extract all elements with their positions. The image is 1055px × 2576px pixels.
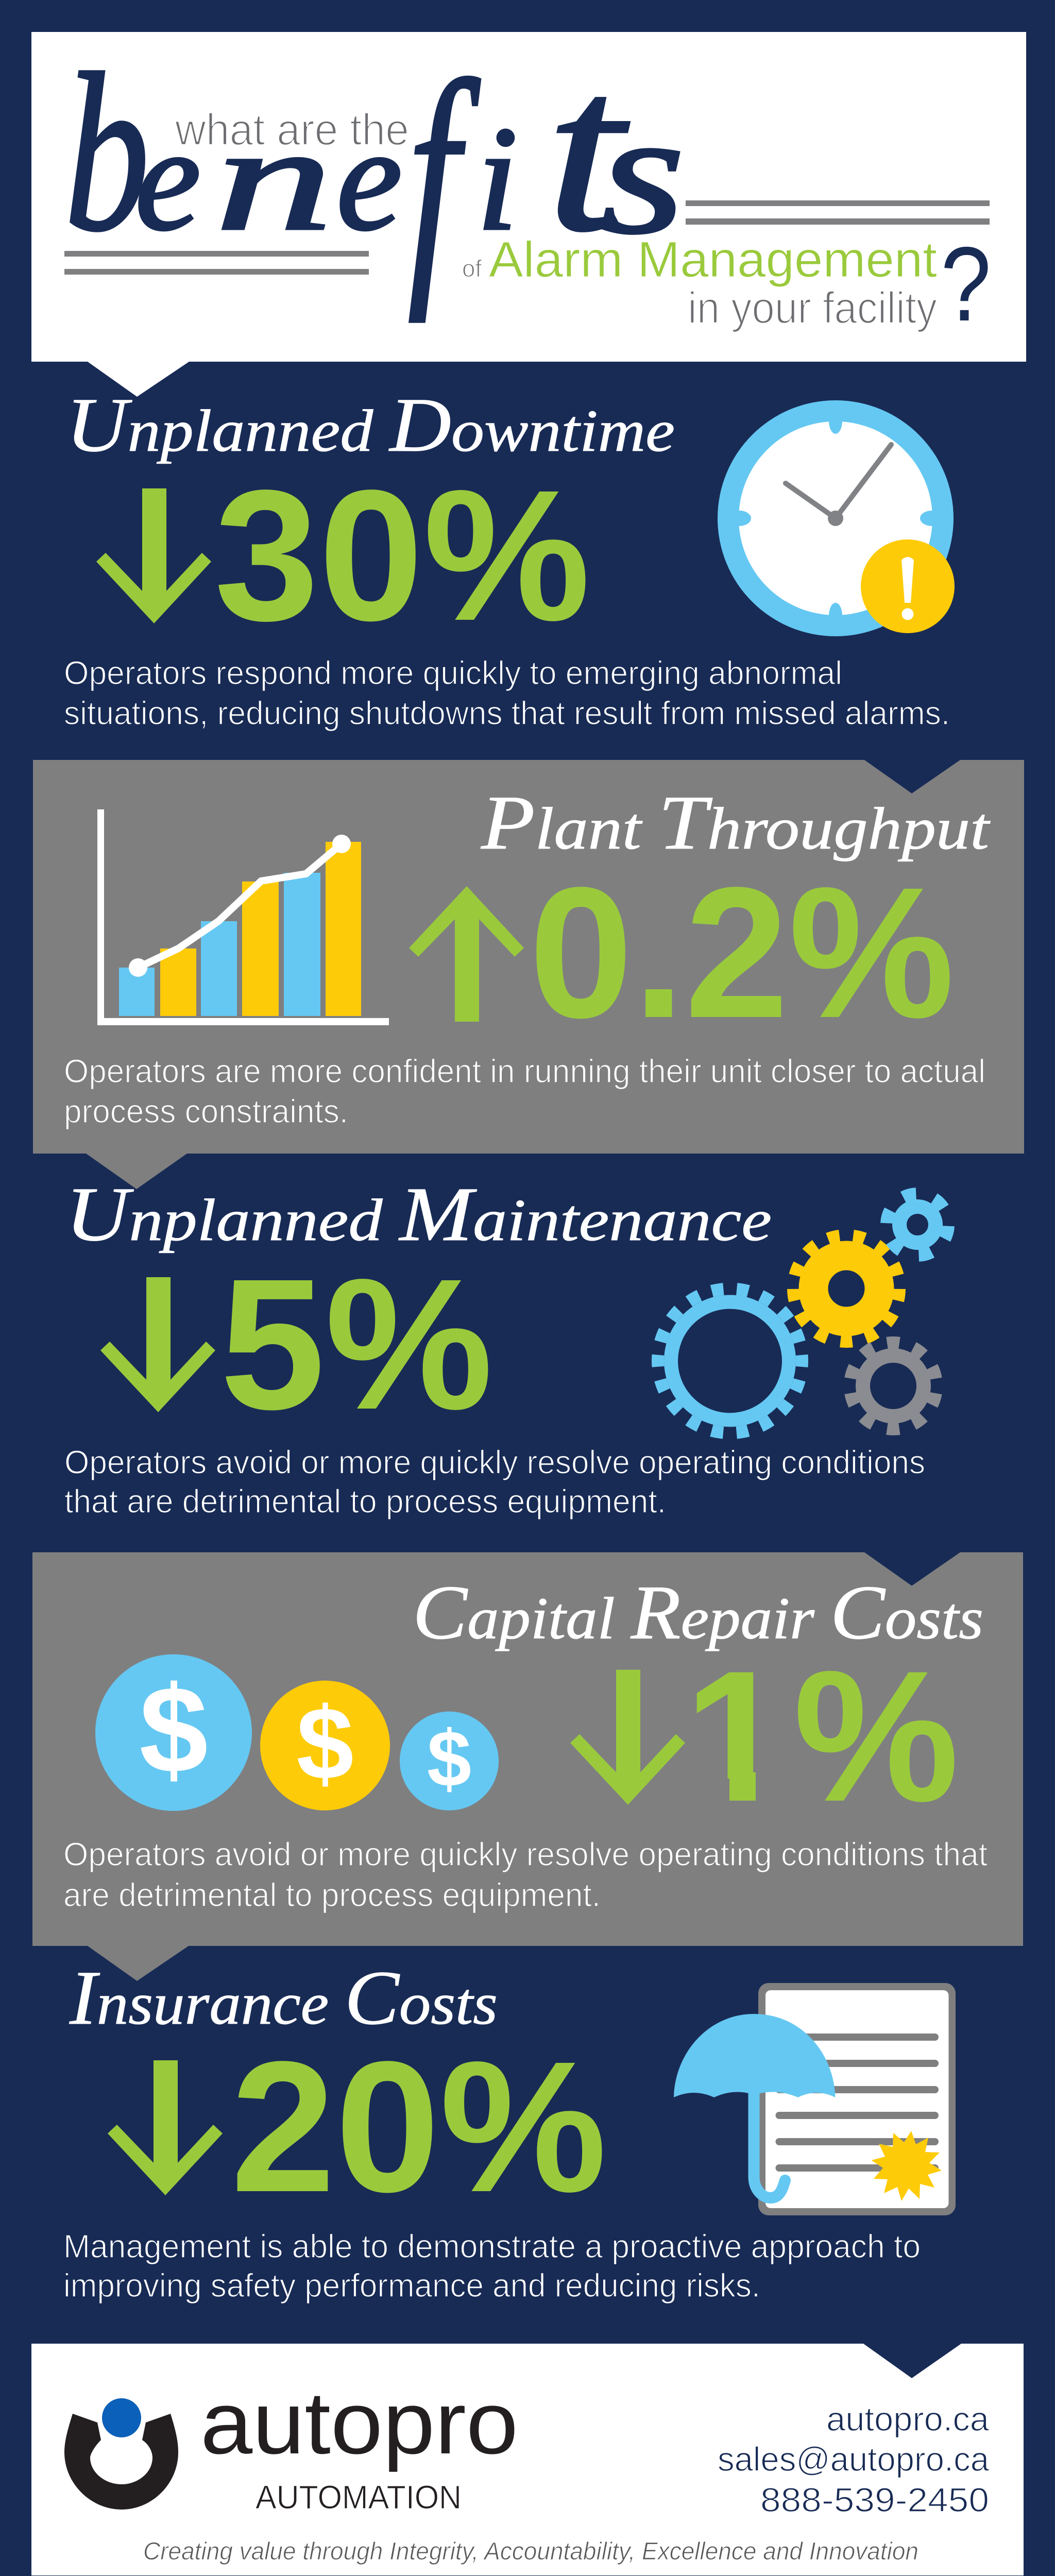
icon: policy document and umbrella: [674, 1983, 956, 2215]
body text: [64, 654, 950, 732]
icon: clock: [718, 400, 955, 636]
panel: header: [31, 23, 1026, 397]
body text: are detrimental to process equipment.: [63, 1876, 601, 1913]
arrow up: [409, 886, 524, 1022]
icon: coins: $: [296, 1686, 354, 1801]
heading: benefits: s: [600, 76, 685, 270]
title: Insurance Costs: [69, 1955, 498, 2041]
stat: 1%: %: [793, 1632, 959, 1840]
body text: [64, 1053, 985, 1130]
contact details: [718, 2400, 989, 2519]
heading: question mark: ?: [941, 225, 991, 343]
rules left: [64, 251, 369, 275]
arrow down: [100, 1277, 215, 1412]
heading: benefits: [64, 23, 685, 323]
arrow down: [108, 2060, 223, 2195]
stat: 0.2%: 0.2%: [529, 848, 955, 1057]
heading: benefits: n: [215, 96, 333, 261]
gear: large blue: [652, 1283, 808, 1439]
heading: in your facility: in your facility: [688, 283, 937, 333]
rules right: [686, 200, 990, 225]
title: Capital Repair Costs: [413, 1570, 983, 1655]
stat: 5%: 5%: [220, 1240, 493, 1448]
body text: [64, 1444, 925, 1520]
gear: yellow: [787, 1229, 906, 1348]
body text: Operators avoid or more quickly resolve operating conditions that: [63, 1836, 988, 1873]
stat: 1%: [683, 1632, 959, 1840]
icon: coins: [95, 1654, 499, 1811]
bar chart: [97, 809, 389, 1025]
logo mark: [64, 2398, 178, 2510]
arrow down: [96, 488, 211, 623]
body text: process constraints.: [64, 1093, 348, 1130]
body text: situations, reducing shutdowns that result from missed alarms.: [64, 694, 950, 732]
body text: Operators are more confident in running their unit closer to actual: [64, 1053, 985, 1090]
heading: benefits: t: [546, 23, 633, 279]
body text: that are detrimental to process equipment.: [64, 1483, 666, 1520]
icon: coins: $: [139, 1660, 208, 1799]
contact details: 888-539-2450: [760, 2481, 989, 2519]
body text: [63, 2228, 921, 2304]
contact details: autopro.ca: [826, 2400, 989, 2438]
panel: plant throughput: [33, 760, 1024, 1189]
gear: small blue: [876, 1183, 959, 1266]
body text: [63, 1836, 988, 1913]
title: Unplanned Maintenance: [65, 1172, 772, 1257]
panel: company contact: [31, 2344, 1024, 2575]
stat: 20%: 20%: [231, 2022, 607, 2231]
heading: of: of: [462, 255, 482, 282]
title: Plant Throughput: [481, 780, 991, 866]
heading: benefits: e: [336, 96, 402, 261]
title: Unplanned Downtime: [66, 382, 675, 468]
heading: benefits: f: [407, 27, 483, 323]
heading: benefits: e: [135, 96, 201, 261]
section: unplanned downtime: [64, 382, 955, 732]
tagline: Creating value through Integrity, Accountability, Excellence and Innovation: [143, 2538, 918, 2565]
arrow down: [570, 1670, 685, 1805]
body text: improving safety performance and reducing risks.: [63, 2267, 760, 2304]
heading: what are the: what are the: [175, 105, 409, 155]
contact details: sales@autopro.ca: [718, 2440, 989, 2478]
body text: Management is able to demonstrate a proactive approach to: [63, 2228, 921, 2265]
gear: grey: [844, 1337, 942, 1435]
logo text: automation: AUTOMATION: [256, 2479, 462, 2516]
body text: Operators respond more quickly to emerging abnormal: [64, 654, 842, 691]
body text: Operators avoid or more quickly resolve operating conditions: [64, 1444, 925, 1481]
heading: Alarm Management: Alarm Management: [489, 231, 937, 287]
heading: benefits: b: [64, 27, 149, 278]
icon: gears: [652, 1183, 959, 1439]
stat: 1%: 1: [684, 1632, 788, 1840]
logo text: autopro: autopro: [200, 2374, 518, 2472]
icon: coins: $: [427, 1714, 471, 1803]
panel: capital repair costs: [32, 1552, 1023, 1981]
section: insurance costs: [63, 1955, 956, 2304]
stat: 30%: 30%: [214, 451, 590, 659]
section: unplanned maintenance: [64, 1172, 959, 1520]
heading: benefits: i: [477, 96, 518, 261]
